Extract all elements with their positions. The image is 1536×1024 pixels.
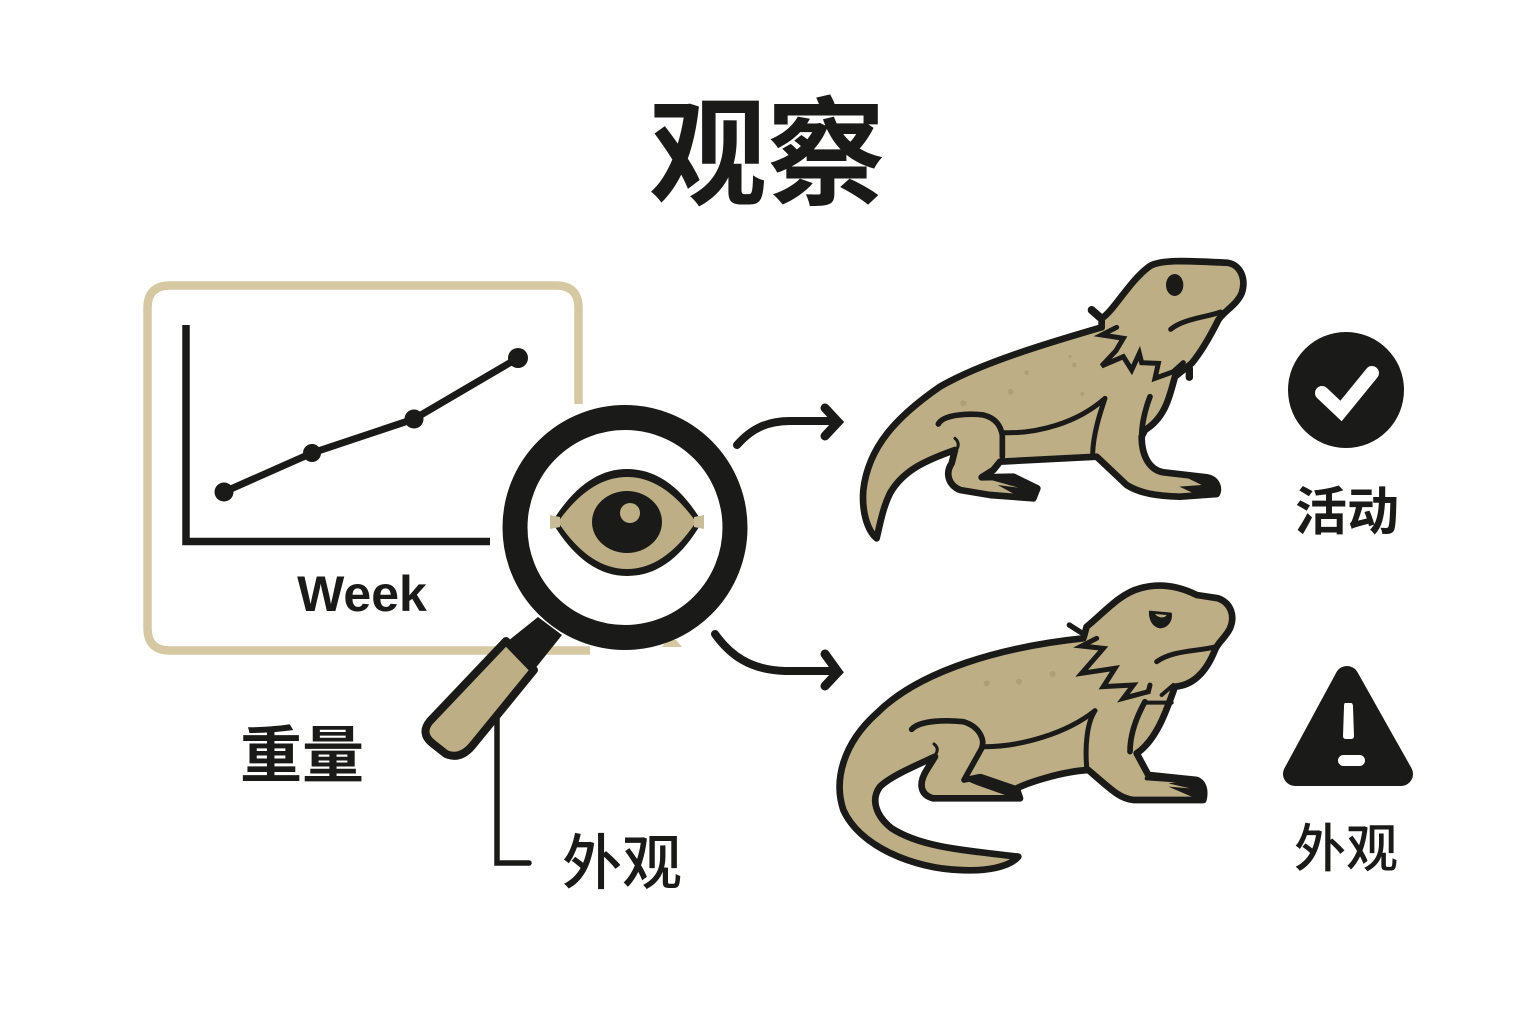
appearance status label: 外观 bbox=[1294, 821, 1398, 879]
icon: warning triangle bbox=[1295, 678, 1401, 774]
icon: magnifying glass with eye bbox=[425, 418, 735, 756]
icon: eye bbox=[550, 469, 704, 576]
activity label: 活动 bbox=[1295, 484, 1399, 542]
panel: weight chart frame bbox=[148, 286, 682, 650]
arrow: to active lizard bbox=[737, 408, 838, 445]
weight label: 重量 bbox=[240, 722, 364, 791]
title: 观察 bbox=[649, 90, 885, 222]
leader line to appearance label bbox=[497, 715, 529, 863]
illustration: active lizard bbox=[863, 261, 1243, 538]
arrow: to unwell lizard bbox=[715, 634, 838, 686]
illustration: unwell lizard bbox=[840, 586, 1232, 870]
appearance label: 外观 bbox=[562, 830, 682, 897]
icon: check mark status bbox=[1288, 332, 1404, 448]
line chart bbox=[186, 325, 528, 542]
chart axis label: Week bbox=[297, 566, 427, 622]
